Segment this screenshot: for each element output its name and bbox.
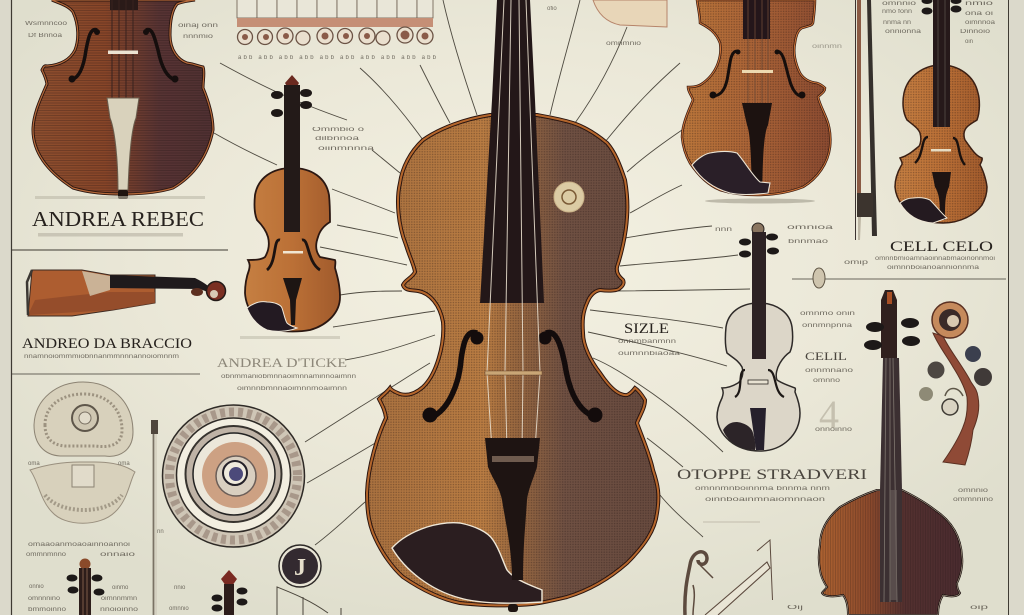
- faint engraved plan diagram: [28, 382, 135, 523]
- f-hole left: [422, 332, 484, 422]
- bottom right caption: oip: [970, 605, 989, 611]
- small caption right: ommnnino: [953, 497, 994, 503]
- bottom scroll sketch: [685, 522, 772, 615]
- small labels above white violin: omnioa: [787, 225, 835, 231]
- Andrea d'Ticke label block: [217, 355, 356, 392]
- faded numeral 4: onnoinno: [815, 427, 853, 433]
- shadow under top left violin: [35, 196, 205, 199]
- main body: [367, 115, 658, 605]
- cello scroll: [881, 290, 897, 358]
- top fret and peg chart: [237, 0, 437, 61]
- text around bottom left neck: omnnnino: [28, 596, 61, 602]
- caption under Otoppe Stradveri: omnnmnboinnma bnnma nnm: [695, 486, 830, 492]
- small text upper left: Df Bnnoa: [28, 33, 63, 39]
- caption under Andreo da Braccio: nnamnoiommmiobnnanmmnnnannoiomnnm: [24, 354, 179, 360]
- bottom right caption: [787, 605, 989, 611]
- faded numeral 4: [815, 392, 853, 437]
- small note near fingerboard: ofio: [547, 6, 557, 12]
- caption under Cell Celo: omip: [844, 260, 869, 266]
- top fret and peg chart: abb abb abb abb abb abb abb abb abb abb: [238, 55, 437, 61]
- small caption right: omnnio: [958, 488, 989, 494]
- tailpiece: [485, 438, 540, 580]
- note block right of white violin: [800, 311, 855, 329]
- small text near top right: nnma nn: [883, 20, 911, 26]
- small labels above white violin: nnn: [715, 227, 732, 233]
- label: Cello: onnmnano: [805, 368, 854, 374]
- bottom second violin neck: [212, 570, 248, 615]
- bottom right caption: Oij: [787, 605, 803, 611]
- small text near top right: omnnio: [882, 1, 917, 7]
- vertical bow left: [151, 420, 164, 615]
- faded numeral 4: 4: [819, 392, 839, 437]
- bottom small notes: [169, 585, 189, 612]
- bridge: [485, 371, 542, 375]
- rebec side view: [27, 270, 226, 316]
- note block right of white violin: onnmnpnna: [802, 323, 853, 329]
- small stand diagram: [277, 587, 341, 615]
- label: Andreo da Braccio: ANDREO DA BRACCIO: [22, 336, 192, 352]
- caption under Cell Celo: oimnnboianoannionnma: [887, 265, 980, 271]
- small labels above white violin: [715, 225, 835, 245]
- label: Size: [618, 321, 681, 357]
- f-hole right: [538, 332, 602, 422]
- cello neck: [880, 358, 902, 602]
- top centre emblem: [593, 0, 667, 27]
- label: Size: onnmbanmnn: [618, 339, 676, 345]
- small text upper left: Wsmnncoo: [25, 21, 68, 27]
- upper right violin: [682, 0, 830, 195]
- caption below diagram: [26, 542, 136, 558]
- faint engraved plan diagram: oma: [118, 461, 130, 467]
- shadow under upper right violin: [705, 198, 815, 204]
- cello: [819, 290, 962, 615]
- white violin: [717, 223, 800, 451]
- small text upper left: [25, 21, 218, 40]
- scroll with pegs: [919, 302, 992, 465]
- caption under Cell Celo: omnnbmioamnaoinnabmaoinonnmoi: [875, 256, 995, 262]
- label: Andrea Rebec: ANDREA REBEC: [32, 207, 204, 231]
- small text near top right: oimnnoa: [965, 20, 996, 26]
- Andrea d'Ticke label block: obnmmaniobmnnaoimnnaminnoaimnn: [221, 374, 356, 380]
- text around bottom left neck: oinmo: [112, 585, 129, 591]
- small text near top right: onnionna: [885, 29, 922, 35]
- small note under emblem: omnmnio: [606, 41, 642, 47]
- small text near top right: nmo fonn: [882, 9, 912, 15]
- small brown violin: [245, 75, 340, 332]
- label: Size: oumnnbiaoaa: [618, 351, 681, 357]
- faint engraved plan diagram: oma: [28, 461, 40, 467]
- label: Otoppe Stradveri: OTOPPE STRADVERI: [677, 467, 867, 483]
- spiral rosette: [162, 405, 304, 547]
- vertical bow left: nn: [157, 529, 164, 535]
- vertical bow right: [856, 0, 877, 240]
- chin rest: [392, 523, 542, 603]
- top left violin: [33, 0, 213, 199]
- caption under Otoppe Stradveri: [695, 486, 830, 503]
- button: [508, 604, 518, 612]
- small text by brown violin: oiinmnnna: [318, 146, 375, 152]
- small caption right: [953, 488, 994, 503]
- main violin: [367, 0, 658, 612]
- cello body: [819, 490, 962, 615]
- bottom left violin neck: [66, 558, 104, 615]
- shadow under brown violin: [240, 336, 340, 339]
- Andrea d'Ticke label block: oimnnbmnnaoimnnmoaimnn: [237, 386, 347, 392]
- right small brown violin: [895, 0, 987, 223]
- text around bottom left neck: onnio: [29, 584, 44, 590]
- label: Cell Celo: CELL CELO: [890, 239, 993, 255]
- bottom small notes: omnnio: [169, 606, 189, 612]
- label badge: [554, 182, 584, 212]
- small labels above white violin: bnnmao: [788, 239, 829, 245]
- small oval ornament: [813, 268, 825, 288]
- text around bottom left neck: bmmoinno: [28, 607, 67, 613]
- caption below diagram: ommnmnno: [26, 552, 67, 558]
- small text upper left: oinaj onn: [178, 23, 218, 29]
- small text near top right: nmio: [965, 1, 994, 7]
- cello pegs: [864, 318, 920, 350]
- caption below diagram: onnaio: [100, 552, 136, 558]
- label: Cello: CELIL: [805, 349, 847, 363]
- caption under Andrea Rebec: [38, 233, 183, 236]
- note block right of white violin: omnmo onin: [800, 311, 855, 317]
- strings: [487, 0, 540, 450]
- small text upper left: nnnmio: [183, 34, 214, 40]
- small text by brown violin: dilbnnoa: [315, 136, 360, 142]
- label: Size: SIZLE: [624, 321, 669, 337]
- f-holes: [71, 30, 176, 80]
- note right of upper right violin: oinnmn: [812, 44, 842, 50]
- text around bottom left neck: [28, 584, 139, 613]
- small text by brown violin: [312, 127, 375, 152]
- caption under Cell Celo: [844, 256, 995, 271]
- small text near top right: oin: [965, 39, 973, 45]
- bottom small notes: nnio: [174, 585, 186, 591]
- text around bottom left neck: oimnnmmn: [101, 596, 137, 602]
- text around bottom left neck: nnoioinno: [100, 607, 139, 613]
- small text near top right: ona oi: [965, 11, 993, 17]
- Andrea d'Ticke label block: ANDREA D'TICKE: [217, 355, 347, 370]
- fingerboard: [480, 0, 544, 303]
- caption below diagram: omaaoanmoaoainnoannoi: [28, 542, 130, 548]
- round medallion: [279, 545, 321, 587]
- label: Cello: omnno: [813, 378, 841, 384]
- leader lines: [214, 0, 750, 545]
- tailpiece fittings: [492, 456, 534, 462]
- small text by brown violin: Ommbio o: [312, 127, 365, 133]
- label: Cello: [805, 349, 854, 384]
- caption under Otoppe Stradveri: oinnboainmnaiomnnaon: [705, 497, 825, 503]
- small text near top right: Dinnoio: [960, 29, 991, 35]
- round medallion: J: [294, 555, 306, 581]
- small text near top right: [882, 1, 996, 45]
